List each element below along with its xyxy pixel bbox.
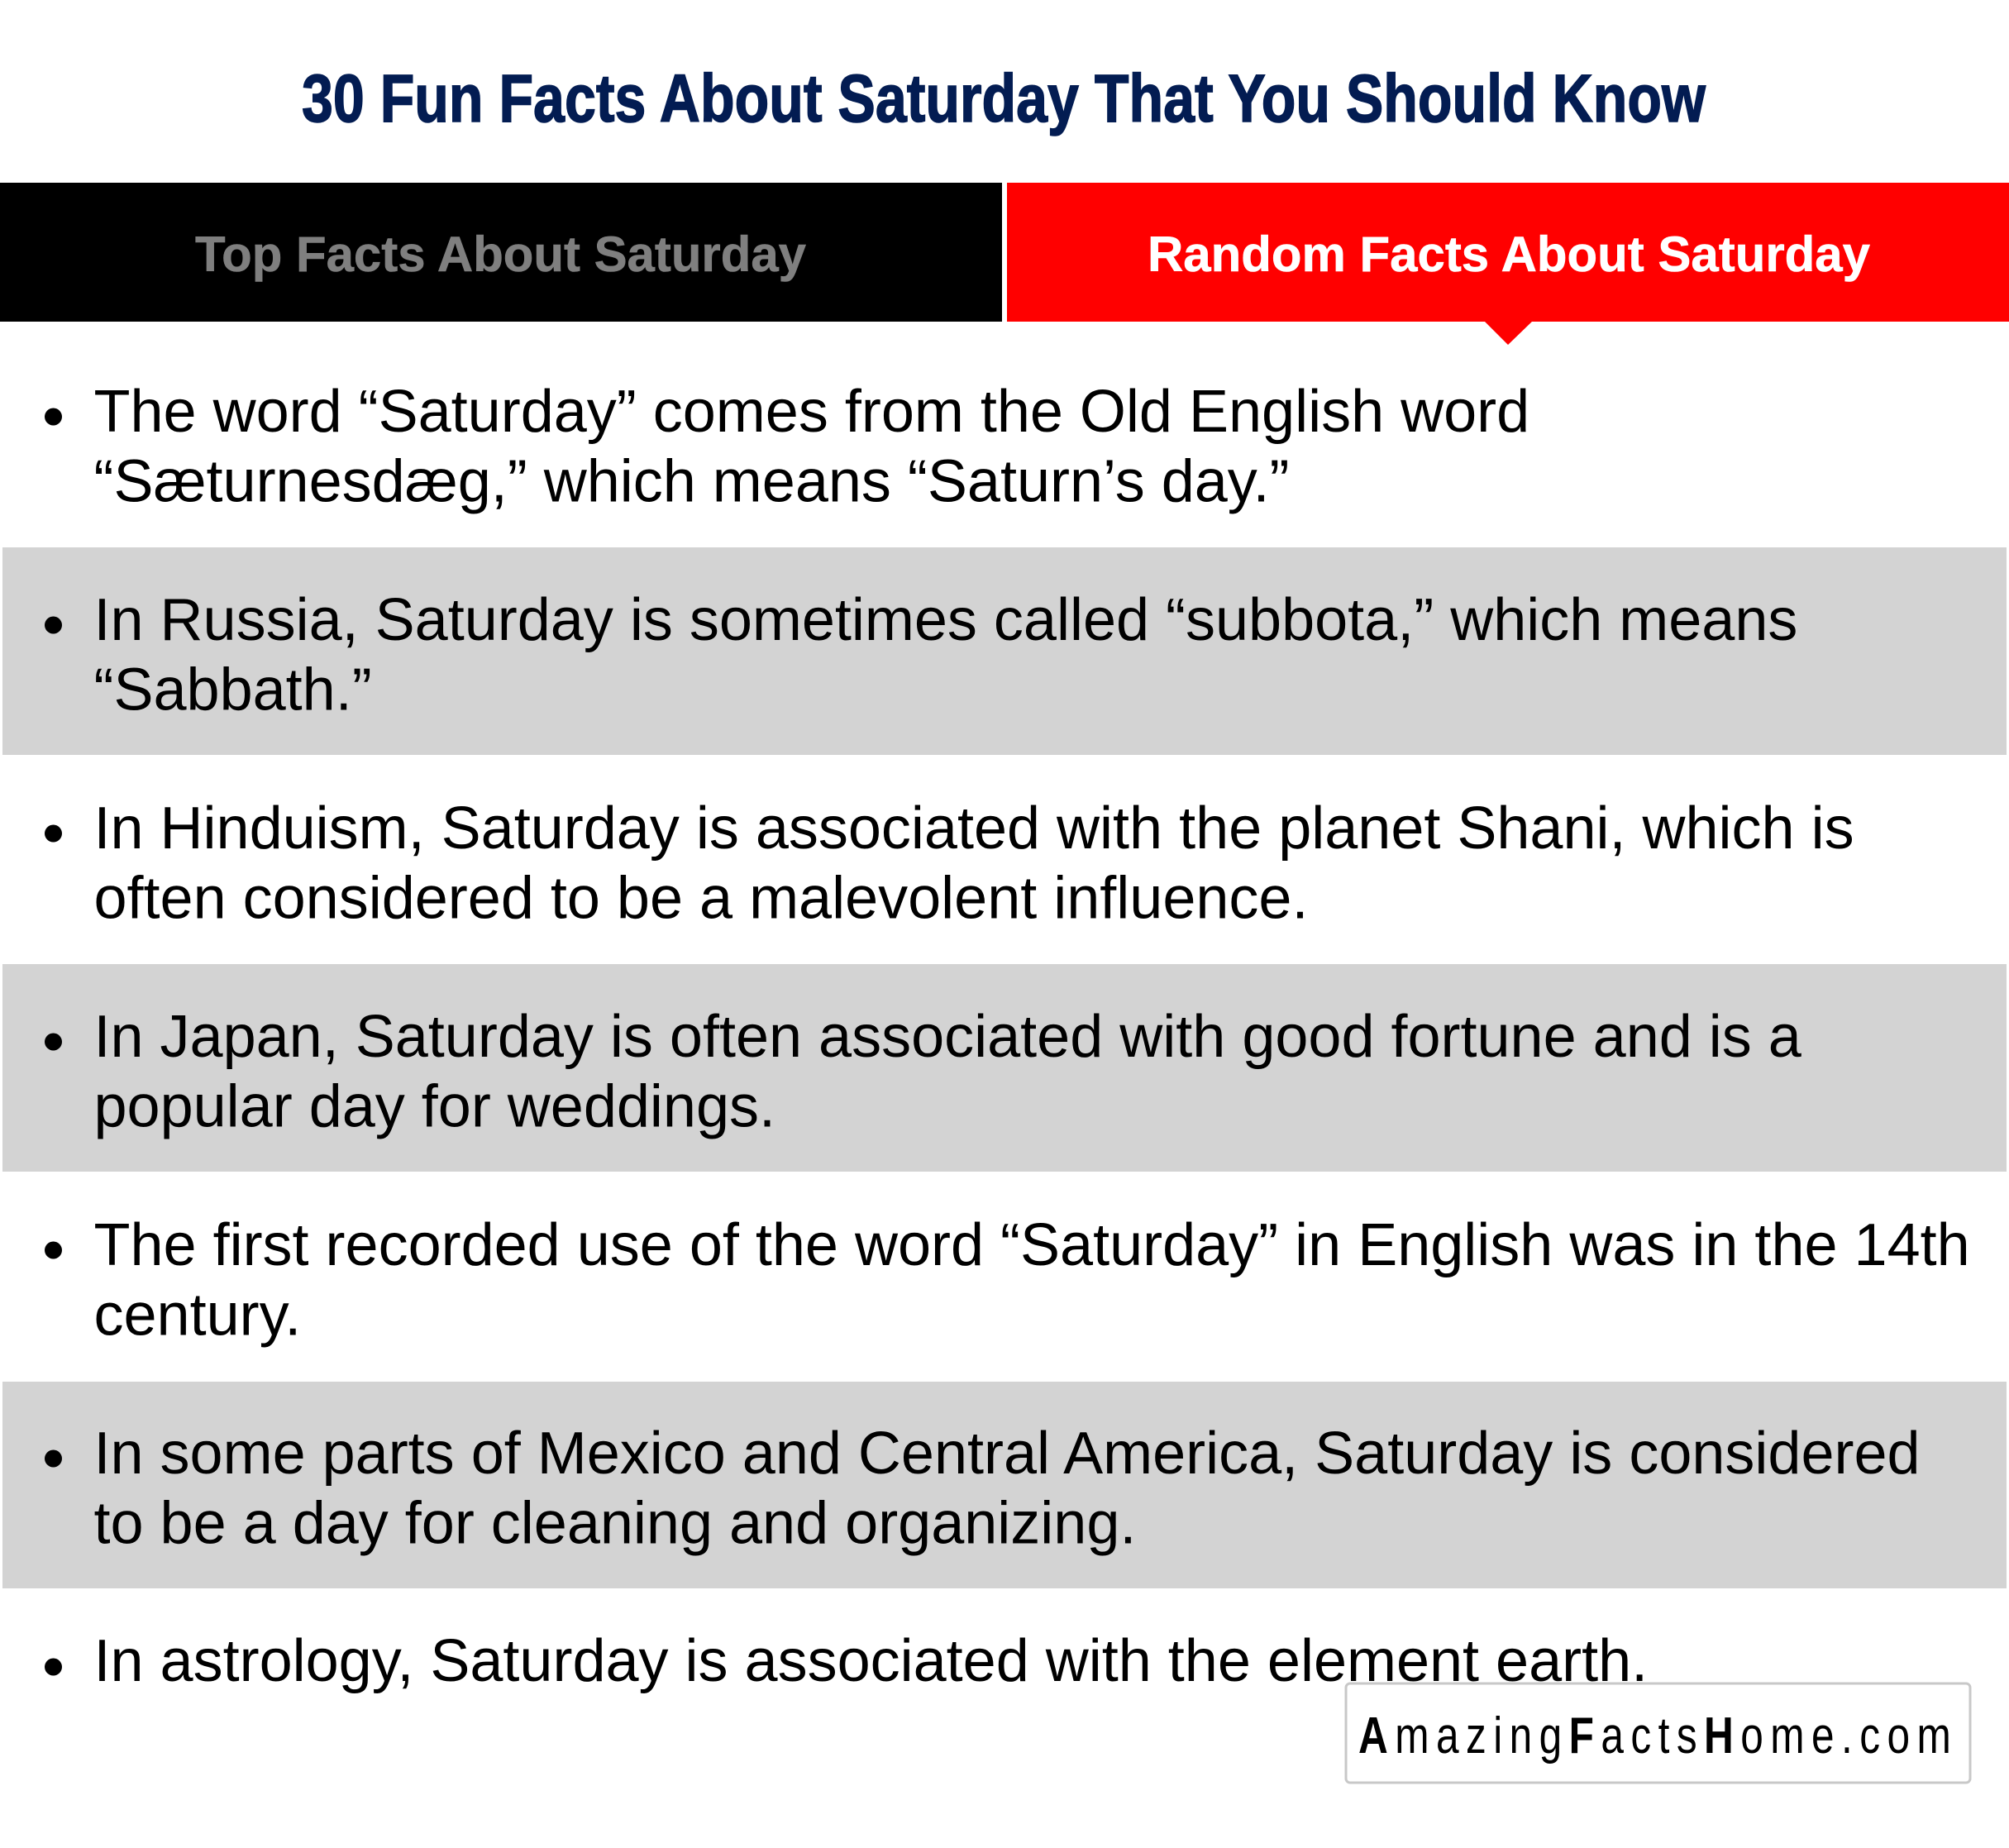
- tab: top facts: [0, 183, 1002, 322]
- fact 5: century.: [94, 1282, 301, 1348]
- fact 2: In Russia, Saturday is sometimes called “subbota,” which means: [94, 587, 1797, 653]
- fact 3: In Hinduism, Saturday is associated with the planet Shani, which is: [94, 795, 1854, 862]
- fact 4: [2, 964, 2007, 1172]
- tab bar: [0, 183, 2009, 345]
- fact 6: [2, 1382, 2007, 1588]
- fact 6: to be a day for cleaning and organizing.: [94, 1490, 1136, 1556]
- fact 2: “Sabbath.”: [94, 657, 372, 723]
- fact 6: In some parts of Mexico and Central America, Saturday is considered: [94, 1421, 1921, 1487]
- fact 4: popular day for weddings.: [94, 1073, 775, 1139]
- fact 3: [45, 795, 1854, 931]
- watermark badge: AmazingFactsHome.com: [1358, 1707, 1951, 1764]
- watermark badge: [1346, 1683, 1970, 1783]
- fact 4: In Japan, Saturday is often associated with good fortune and is a: [94, 1004, 1802, 1070]
- fact 5: The first recorded use of the word “Saturday” in English was in the 14th: [94, 1212, 1970, 1278]
- fact 3: often considered to be a malevolent influence.: [94, 865, 1308, 931]
- fact 2: [2, 547, 2007, 755]
- fact 5: [45, 1212, 1970, 1348]
- fact 1: [45, 379, 1529, 514]
- title: 30 Fun Facts About Saturday That You Should Know: [302, 61, 1706, 136]
- tab: random facts (active): Random Facts About Saturday: [1148, 227, 1871, 282]
- tab: top facts: Top Facts About Saturday: [195, 227, 807, 282]
- fact list: [2, 379, 2007, 1694]
- tab: random facts (active): [1007, 183, 2009, 345]
- fact 1: “Sæturnesdæg,” which means “Saturn’s day.”: [94, 448, 1289, 514]
- fact 7: In astrology, Saturday is associated with the element earth.: [94, 1628, 1648, 1694]
- fact 1: The word “Saturday” comes from the Old English word: [94, 379, 1529, 445]
